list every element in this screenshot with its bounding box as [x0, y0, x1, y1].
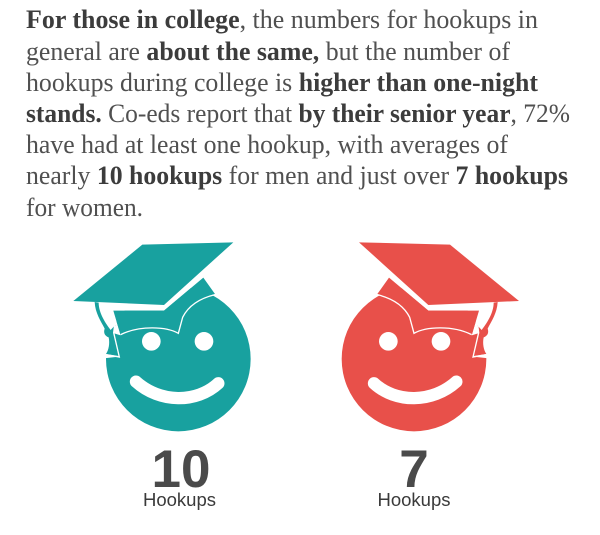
line 5: have had at least one hookup, with averages of	[26, 130, 508, 159]
line 6: nearly 10 hookups for men and just over 7 hookups	[26, 161, 568, 190]
line 7: for women.	[26, 193, 143, 222]
line 3: hookups during college is higher than one-night	[26, 68, 538, 97]
label: hookups: Hookups	[143, 489, 216, 510]
number 10: 10	[152, 440, 210, 499]
number 7: 7	[399, 440, 429, 499]
icon: red graduate smiley (women)	[342, 242, 519, 431]
line 1: For those in college, the numbers for hookups in	[26, 5, 538, 34]
icon: teal graduate smiley (men)	[73, 242, 251, 431]
stat: women 7 hookups	[378, 440, 450, 510]
label: hookups: Hookups	[378, 489, 450, 510]
line 4: stands. Co-eds report that by their senior year, 72%	[26, 99, 570, 128]
intro paragraph	[26, 5, 570, 222]
line 2: general are about the same, but the number of	[26, 37, 510, 66]
stat: men 10 hookups	[143, 440, 216, 510]
